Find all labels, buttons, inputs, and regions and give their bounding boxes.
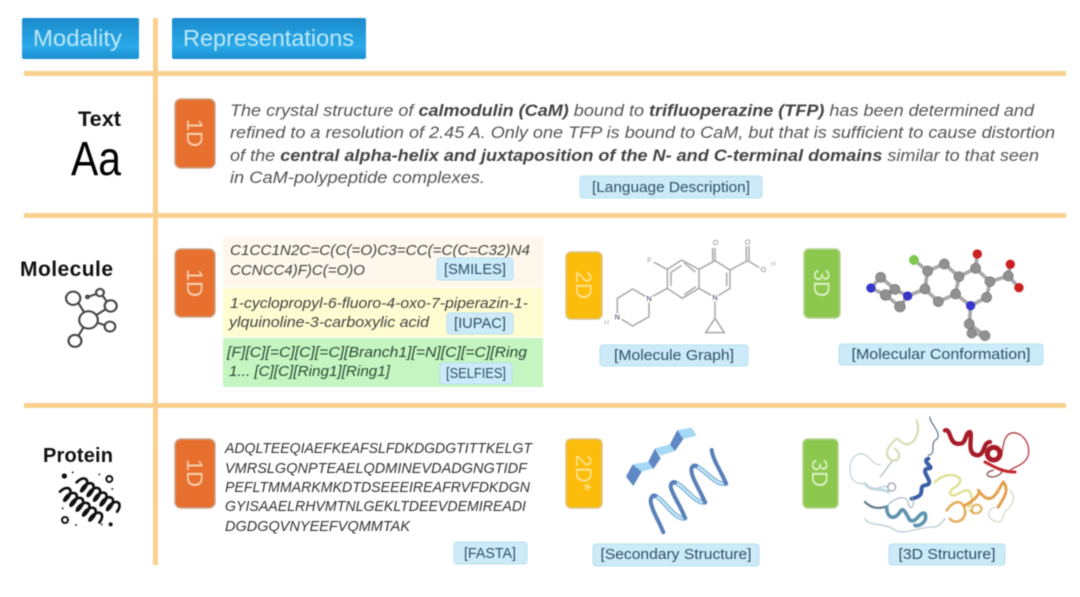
text block: language description: in CaM-polypeptide complexes. (230, 169, 485, 187)
text block: language description: refined to a resolution of 2.45 A. Only one TFP is bound to CaM, but that is sufficient to cause distortion (230, 124, 1055, 142)
text block: language description (230, 102, 1055, 187)
label: FASTA: [FASTA] (464, 545, 516, 562)
row label: Molecule: Molecule (20, 258, 113, 281)
label: Molecule Graph: [Molecule Graph] (614, 347, 734, 364)
heading: Modality: Modality (33, 25, 123, 51)
badge: molecule 3D (804, 249, 840, 318)
badge: protein 3D (803, 439, 838, 508)
label: Secondary Structure (593, 544, 759, 566)
chart: molecule graph: N (646, 294, 652, 303)
panel: SMILES: C1CC1N2C=C(C(=O)C3=CC(=C(C=C32)N4 (230, 242, 530, 259)
chart: molecule graph: O (745, 237, 751, 246)
heading: Modality (22, 18, 139, 59)
icon: protein (57, 471, 122, 526)
panel: IUPAC (223, 288, 543, 337)
heading: Representations: Representations (183, 25, 354, 51)
panel: SELFIES (223, 338, 543, 387)
chart: molecule graph: N (712, 293, 718, 302)
chart: molecule graph: N (615, 312, 620, 321)
label: Language Description: [Language Description] (592, 179, 750, 196)
chart: molecule graph: H (604, 319, 609, 326)
label: 3D Structure: [3D Structure] (898, 546, 996, 563)
panel: SELFIES: [SELFIES] (446, 365, 506, 382)
label: Molecular Conformation: [Molecular Conformation] (852, 346, 1030, 363)
text block: FASTA sequence: PEFLTMMARKMKDTDSEEEIREAFRVFDKDGN (225, 479, 530, 496)
chart: molecule graph: F (647, 256, 652, 265)
text block: FASTA sequence: ADQLTEEQIAEFKEAFSLFDKDGDGTITTKELGT (224, 440, 534, 457)
badge: molecule 1D (175, 249, 215, 317)
panel: IUPAC: 1-cyclopropyl-6-fluoro-4-oxo-7-piperazin-1- (230, 295, 528, 312)
heading: Representations (172, 18, 366, 59)
panel: SMILES: [SMILES] (444, 261, 506, 278)
label: Molecule Graph (600, 345, 748, 366)
badge: text 1D: 1D (182, 119, 207, 147)
text block: language description: The crystal structure of calmodulin (CaM) bound to trifluoperazine (TFP) has been determined and (230, 102, 1035, 120)
badge: protein 2D*: 2D* (571, 455, 596, 492)
badge: protein 1D (175, 439, 215, 508)
panel: SELFIES: [F][C][=C][C][=C][Branch1][=N][C][=C][Ring (226, 344, 528, 361)
label: Language Description (580, 176, 762, 198)
panel: IUPAC: ylquinoline-3-carboxylic acid (228, 314, 430, 331)
label: Secondary Structure: [Secondary Structure] (600, 546, 752, 563)
panel: SMILES (223, 237, 543, 287)
icon: molecule (66, 289, 117, 347)
text block: FASTA sequence: VMRSLGQNPTEAELQDMINEVDADGNGTIDF (225, 460, 528, 477)
badge: molecule 2D: 2D (571, 271, 596, 299)
badge: text 1D (175, 99, 215, 168)
chart: secondary structure (626, 428, 726, 532)
row label: Protein: Protein (43, 445, 113, 467)
label: 3D Structure (889, 544, 1005, 565)
badge: molecule 3D: 3D (809, 269, 834, 297)
row label: Text: Aa (71, 133, 121, 186)
text block: FASTA sequence: DGDGQVNYEEFVQMMTAK (225, 518, 411, 535)
text block: FASTA sequence (224, 440, 534, 535)
label: FASTA (454, 542, 527, 564)
text block: FASTA sequence: GYISAAELRHVMTNLGEKLTDEEVDEMIREADI (225, 498, 526, 515)
chart: 3D protein structure (850, 417, 1029, 532)
row label: Text: Text (78, 108, 121, 131)
chart: molecule graph (604, 237, 776, 333)
chart: molecular conformation (866, 249, 1024, 341)
panel: SMILES: CCNCC4)F)C(=O)O (230, 262, 365, 279)
chart: molecule graph: H (771, 261, 776, 268)
badge: molecule 1D: 1D (182, 269, 207, 297)
text block: language description: of the central alpha-helix and juxtaposition of the N- and C-terminal domains similar to that seen (230, 147, 1039, 165)
badge: protein 3D: 3D (807, 459, 832, 487)
panel: IUPAC: [IUPAC] (454, 315, 506, 332)
chart: molecule graph: O (760, 265, 766, 274)
panel: SELFIES: 1... [C][C][Ring1][Ring1] (229, 363, 391, 380)
label: Molecular Conformation (839, 344, 1043, 365)
badge: protein 1D: 1D (182, 459, 207, 487)
badge: molecule 2D (566, 252, 602, 319)
row label: Text (71, 108, 121, 186)
badge: protein 2D* (566, 439, 602, 508)
chart: molecule graph: O (713, 238, 719, 247)
